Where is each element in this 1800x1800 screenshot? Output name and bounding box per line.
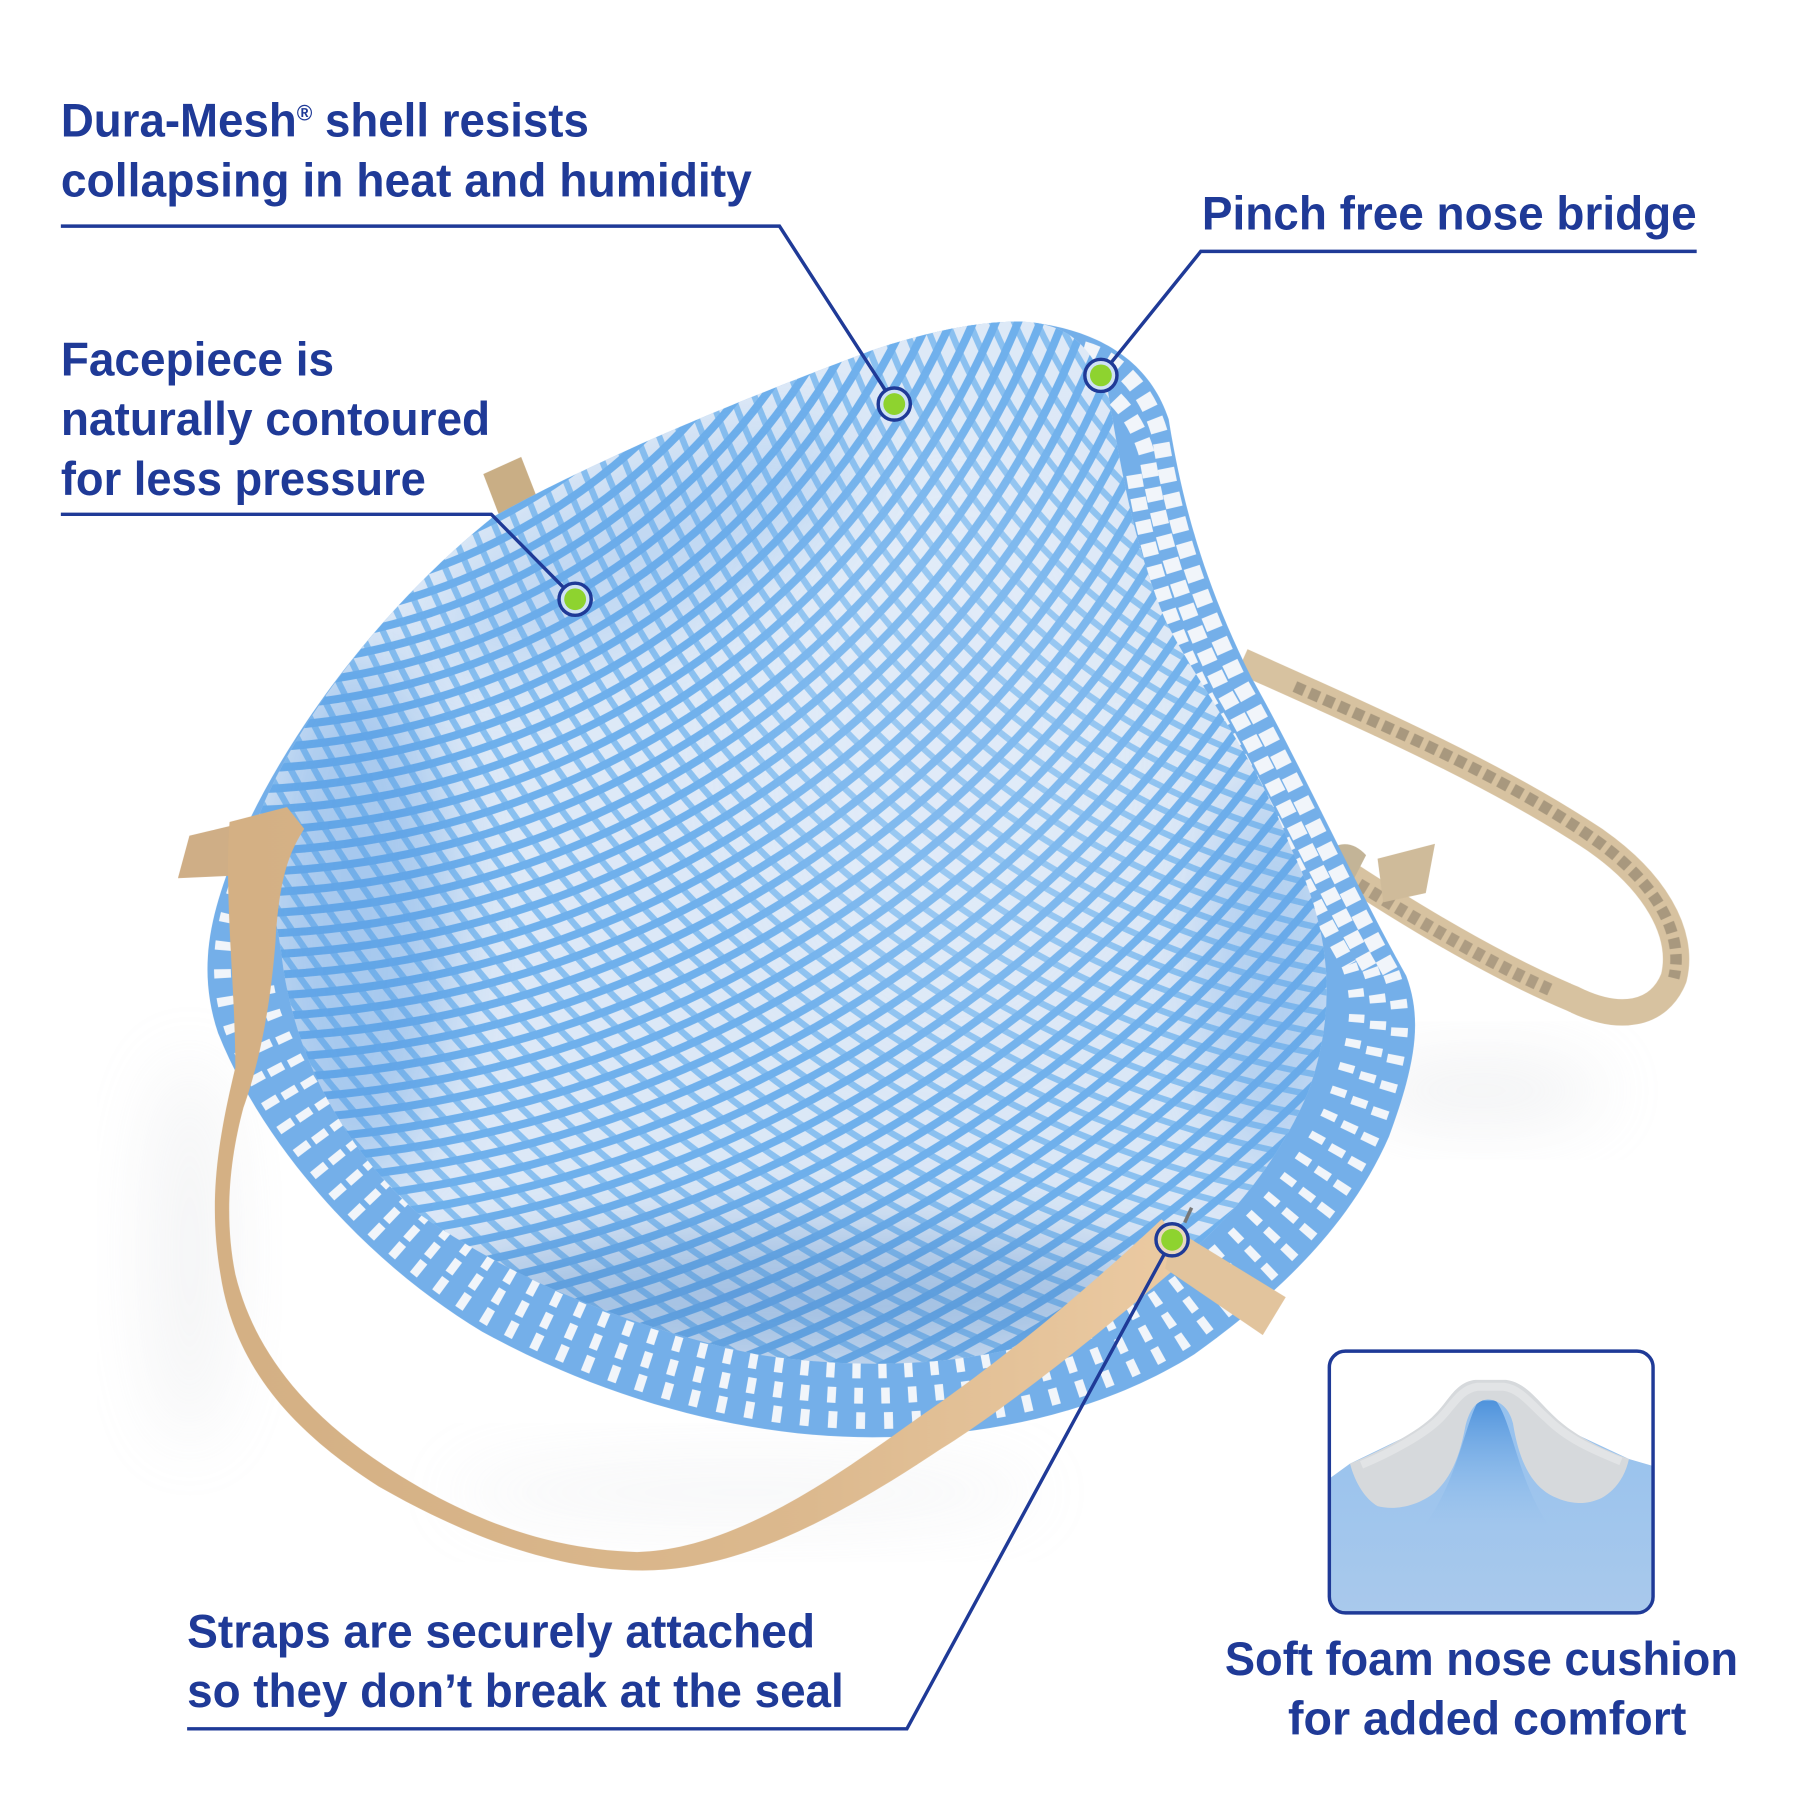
callout: Dura-Mesh shell: shell resists bbox=[312, 94, 589, 147]
leader line: pinch free nose bridge bbox=[1101, 251, 1697, 375]
mask: flange bbox=[207, 321, 1415, 1437]
callout: soft foam nose cushion bbox=[1225, 1632, 1738, 1745]
callout: facepiece bbox=[61, 332, 490, 505]
callout: straps: so they don’t break at the seal bbox=[187, 1664, 844, 1717]
callout: facepiece: Facepiece is bbox=[61, 332, 334, 385]
callout: soft foam nose cushion: Soft foam nose cushion bbox=[1225, 1632, 1738, 1685]
inset: foam nose cushion bbox=[1329, 1351, 1653, 1613]
left strap with attachment bbox=[178, 807, 1286, 1570]
mask: dome with mesh bbox=[260, 322, 1327, 1364]
leader line: Dura-Mesh shell bbox=[61, 226, 894, 404]
top strap tab bbox=[483, 457, 537, 519]
callout: facepiece: naturally contoured bbox=[61, 392, 490, 445]
marker: facepiece bbox=[559, 583, 591, 615]
marker: nose bridge bbox=[1085, 359, 1117, 391]
callout: facepiece: for less pressure bbox=[61, 452, 426, 505]
soft shadows under the mask bbox=[143, 1056, 1607, 1527]
leader line: facepiece bbox=[61, 514, 575, 599]
callout: straps bbox=[187, 1604, 844, 1717]
callout: Dura-Mesh shell bbox=[61, 94, 752, 206]
callout: Dura-Mesh shell: Dura-Mesh bbox=[61, 94, 304, 147]
callout: straps: Straps are securely attached bbox=[187, 1604, 815, 1657]
right head strap bbox=[1242, 661, 1676, 1012]
callout: soft foam nose cushion: for added comfort bbox=[1288, 1692, 1687, 1745]
callout: Dura-Mesh shell: ® bbox=[297, 101, 312, 126]
callout: pinch free nose bridge: Pinch free nose bridge bbox=[1202, 187, 1697, 240]
marker: Dura-Mesh shell bbox=[878, 388, 910, 420]
callout: Dura-Mesh shell: collapsing in heat and humidity bbox=[61, 153, 752, 206]
leader line: straps bbox=[187, 1240, 1172, 1729]
marker: strap attachment bbox=[1156, 1224, 1188, 1256]
